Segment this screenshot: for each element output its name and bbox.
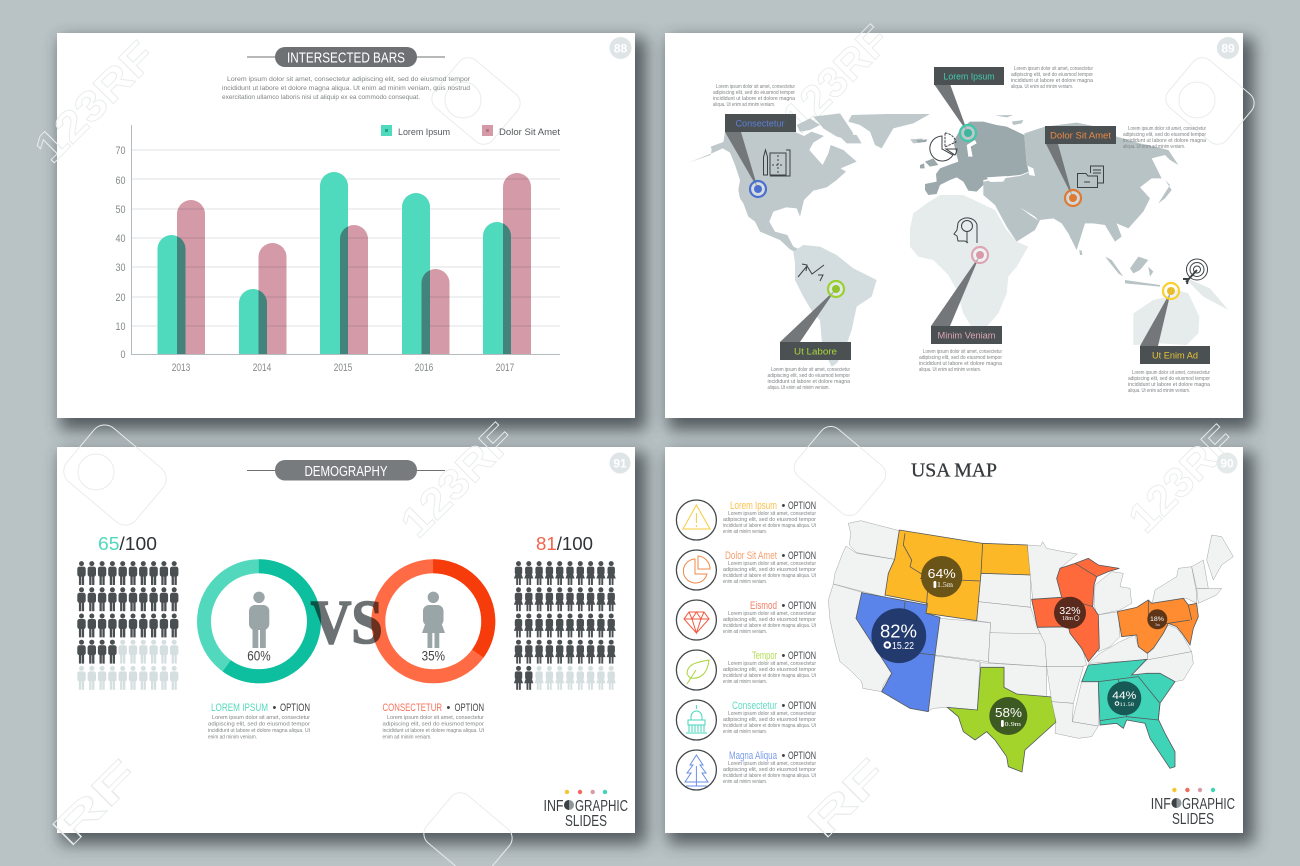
logo: infographic slides: INF xyxy=(1151,796,1171,813)
text block: ut enim ad xyxy=(1128,370,1210,394)
legend item: tempor: incididunt ut labore et dolore magna aliqua. Ut xyxy=(723,673,816,679)
text block: consectetur: incididunt ut labore et dolore magna xyxy=(713,96,795,102)
watermark: 123RF stamp: 123RF xyxy=(391,414,523,546)
data bubble: 58% xyxy=(989,697,1027,735)
legend xyxy=(381,125,560,138)
data bubble: 44%: 44% xyxy=(1112,690,1137,702)
heading: intersected bars xyxy=(247,47,445,67)
label: consectetur option: OPTION xyxy=(454,702,484,714)
data bubble: 44% xyxy=(1107,681,1141,715)
data bubble: 32%: 18m xyxy=(1062,616,1073,622)
legend item: lorem ipsum: Lorem ipsum dolor sit amet, consectetur xyxy=(728,511,816,517)
legend item: eiusmod: Eismod xyxy=(750,600,777,612)
legend item: lorem ipsum: adipiscing elit, sed do eiusmod tempor xyxy=(723,517,816,523)
region: midwest red xyxy=(1032,558,1119,662)
data bubble: 64%: 1.5m xyxy=(937,581,954,589)
icon: folder and documents xyxy=(1078,166,1104,188)
text block: ut labore: incididunt ut labore et dolore magna xyxy=(768,379,850,385)
legend item: dolor sit amet: • xyxy=(782,550,786,562)
text block: dolor sit amet: Lorem ipsum dolor sit amet, consectetur xyxy=(1128,126,1206,132)
arctic russia xyxy=(995,115,1023,125)
legend item: lorem ipsum: incididunt ut labore et dolore magna aliqua. Ut xyxy=(723,523,816,529)
text block: lorem ipsum: incididunt ut labore et dolore magna xyxy=(1011,78,1093,84)
logo: infographic slides xyxy=(1151,788,1235,828)
legend item: consectetur: adipiscing elit, sed do eiusmod tempor xyxy=(723,717,816,723)
label: consectetur option: CONSECTETUR xyxy=(382,702,442,714)
donut chart: teal 60% xyxy=(204,566,314,676)
text block: minim veniam: adipiscing elit, sed do eiusmod tempor xyxy=(919,355,1002,361)
text block: ut labore: Lorem ipsum dolor sit amet, consectetur xyxy=(771,367,850,373)
region: mountain north yellow xyxy=(885,530,1032,621)
label: lorem ipsum option: LOREM IPSUM xyxy=(211,702,268,714)
intro text block: exercitation ullamco laboris nisi ut aliquip ex ea commodo consequat. xyxy=(222,94,420,101)
legend item: eiusmod: Lorem ipsum dolor sit amet, consectetur xyxy=(728,611,816,617)
intro text block xyxy=(222,76,471,101)
inland seas xyxy=(967,140,1038,221)
text block: consectetur: adipiscing elit, sed do eiusmod tempor xyxy=(713,90,795,96)
legend list xyxy=(676,500,816,790)
panel: world map xyxy=(665,16,1259,418)
text block: lorem ipsum: adipiscing elit, sed do eiusmod tempor xyxy=(1011,72,1093,78)
y axis labels: 50 xyxy=(116,204,126,216)
text block: consectetur: aliqua. Ut enim ad minim veniam. xyxy=(713,102,775,108)
y axis labels xyxy=(116,145,126,361)
legend item: tempor: adipiscing elit, sed do eiusmod tempor xyxy=(723,667,816,673)
plain states west xyxy=(828,521,1047,712)
legend item: eiusmod: • xyxy=(782,600,786,612)
data bubble: 58%: 0.9m xyxy=(1004,721,1021,728)
data bubble: 18%: 3m xyxy=(1155,622,1161,627)
callout: ut enim ad xyxy=(1140,283,1210,364)
data bubble: 18%: 18% xyxy=(1150,616,1164,623)
y axis labels: 20 xyxy=(116,292,126,304)
x axis labels xyxy=(172,362,514,374)
callout: lorem ipsum: Lorem Ipsum xyxy=(944,72,995,82)
legend item: consectetur: OPTION xyxy=(788,700,816,712)
y axis labels: 10 xyxy=(116,321,126,333)
legend item: tempor: Tempor xyxy=(752,650,777,662)
bar chart xyxy=(116,125,560,374)
icon: head with keyhole xyxy=(954,218,977,243)
teal bars xyxy=(158,172,511,354)
page number badge xyxy=(1216,452,1238,474)
africa xyxy=(910,195,1028,330)
text block: ut labore: aliqua. Ut enim ad minim veniam. xyxy=(768,385,830,391)
legend item: tempor: enim ad minim veniam. xyxy=(723,679,767,685)
text block: dolor sit amet: adipiscing elit, sed do eiusmod tempor xyxy=(1123,132,1206,138)
icon: blueprint and pencil xyxy=(764,150,790,176)
legend item: dolor sit amet: Lorem ipsum dolor sit amet, consectetur xyxy=(728,561,816,567)
text block: dolor sit amet xyxy=(1123,126,1206,150)
page number badge xyxy=(1217,37,1239,59)
legend item: eiusmod: OPTION xyxy=(788,600,816,612)
europe asia africa australia xyxy=(910,115,1228,345)
x axis labels: 2014 xyxy=(253,362,271,374)
text block: left option: Lorem ipsum dolor sit amet, consectetur xyxy=(212,715,310,721)
text block: right option: Lorem ipsum dolor sit amet, consectetur xyxy=(387,715,484,721)
icon: pie chart xyxy=(930,133,957,161)
data bubble: 82% xyxy=(871,608,926,663)
icon: female figure xyxy=(422,592,445,648)
heading: intersected bars: INTERSECTED BARS xyxy=(287,50,405,66)
watermark: 123RF stamp xyxy=(25,32,525,171)
callout: dolor sit amet xyxy=(1045,126,1116,206)
icon: target xyxy=(1183,259,1208,284)
legend item: lorem ipsum: • xyxy=(782,500,786,512)
text block: right option: incididunt ut labore et dolore magna aliqua. Ut xyxy=(382,728,485,734)
panel: intersected bars xyxy=(25,32,635,418)
logo: infographic slides: SLIDES xyxy=(565,813,607,830)
logo: infographic slides xyxy=(544,790,628,830)
text block: dolor sit amet: incididunt ut labore et dolore magna xyxy=(1123,138,1206,144)
legend: Dolor Sit Amet xyxy=(499,127,560,138)
new guinea xyxy=(1183,277,1228,310)
icon: growth arrows xyxy=(798,264,824,281)
text block: ut enim ad: aliqua. Ut enim ad minim veniam. xyxy=(1128,388,1190,394)
southeast asia islands xyxy=(1105,257,1160,287)
watermark: 123RF stamp: 123RF xyxy=(25,32,164,171)
pictogram: right people grid xyxy=(514,561,616,690)
legend item: lorem ipsum xyxy=(676,500,816,540)
pink bars xyxy=(177,173,531,354)
text block: ut labore xyxy=(768,367,850,391)
legend item: dolor sit amet xyxy=(676,550,816,590)
usa map: western states xyxy=(828,521,1056,772)
logo: infographic slides: GRAPHIC xyxy=(1182,796,1235,813)
callout: ut labore xyxy=(780,281,851,360)
legend item: tempor: • xyxy=(782,650,786,662)
legend item: dolor sit amet: incididunt ut labore et dolore magna aliqua. Ut xyxy=(723,573,816,579)
south america xyxy=(793,245,877,367)
page number badge: 90 xyxy=(1220,456,1234,470)
text block: ut labore: adipiscing elit, sed do eiusmod tempor xyxy=(768,373,850,379)
pictogram: left people grid xyxy=(77,561,178,690)
legend item: consectetur: enim ad minim veniam. xyxy=(723,729,767,735)
y axis labels: 40 xyxy=(116,233,126,245)
callout: minim veniam: Minim Veniam xyxy=(938,330,996,342)
text block: left option xyxy=(208,715,311,740)
legend item: lorem ipsum: enim ad minim veniam. xyxy=(723,529,767,535)
legend item: tempor xyxy=(676,650,816,690)
text block: lorem ipsum: aliqua. Ut enim ad minim veniam. xyxy=(1011,84,1073,90)
legend item: tempor: Lorem ipsum dolor sit amet, consectetur xyxy=(728,661,816,667)
callout: minim veniam xyxy=(931,247,1002,344)
page number badge: 91 xyxy=(613,456,627,470)
legend item: magna aliqua: OPTION xyxy=(788,750,816,762)
legend item: magna aliqua: • xyxy=(782,750,786,762)
legend item: tempor: OPTION xyxy=(788,650,816,662)
stat: 65/100: 65/100 xyxy=(98,533,157,554)
legend item: magna aliqua: Lorem ipsum dolor sit amet, consectetur xyxy=(728,761,816,767)
text block: minim veniam: Lorem ipsum dolor sit amet, consectetur xyxy=(923,349,1002,355)
watermark: 123RF stamp: 123RF xyxy=(773,16,898,141)
x axis labels: 2016 xyxy=(415,362,433,374)
legend item: eiusmod xyxy=(676,600,816,640)
legend item: magna aliqua: incididunt ut labore et dolore magna aliqua. Ut xyxy=(723,773,816,779)
heading: usa map: USA MAP xyxy=(911,460,997,482)
data bubble: 58%: 58% xyxy=(995,706,1022,720)
data bubble: 44%: 11.58 xyxy=(1120,702,1134,708)
donut chart: red 35% xyxy=(378,566,488,676)
watermark: 123RF stamp xyxy=(43,414,523,866)
page number badge: 88 xyxy=(614,42,627,56)
region: northeast orange xyxy=(1117,598,1198,653)
data bubble: 18% xyxy=(1147,609,1167,629)
watermark: 123RF stamp: 123RF xyxy=(1119,416,1244,541)
europe xyxy=(916,122,1033,195)
page number badge: 89 xyxy=(1221,42,1235,56)
watermark: 123RF stamp: RF xyxy=(798,749,895,846)
watermark: 123RF stamp xyxy=(789,416,1244,846)
legend item: dolor sit amet: OPTION xyxy=(788,550,816,562)
legend item: eiusmod: incididunt ut labore et dolore magna aliqua. Ut xyxy=(723,623,816,629)
page number badge xyxy=(610,452,630,474)
text block: minim veniam: incididunt ut labore et dolore magna xyxy=(919,361,1002,367)
versus mark: VS xyxy=(311,589,383,657)
text block: lorem ipsum xyxy=(1011,66,1093,90)
stat: 81/100: 81/100 xyxy=(536,533,593,554)
legend item: consectetur: • xyxy=(782,700,786,712)
panel: usa map xyxy=(665,416,1244,846)
americas and greenland xyxy=(688,113,930,367)
legend item: consectetur: Consectetur xyxy=(732,700,777,712)
legend item: dolor sit amet: enim ad minim veniam. xyxy=(723,579,767,585)
text block: ut enim ad: adipiscing elit, sed do eiusmod tempor xyxy=(1128,376,1210,382)
australia xyxy=(1133,290,1199,345)
legend item: consectetur xyxy=(676,700,816,740)
callout: dolor sit amet: Dolor Sit Amet xyxy=(1050,130,1111,142)
legend item: lorem ipsum: Lorem Ipsum xyxy=(730,500,777,512)
legend item: eiusmod: adipiscing elit, sed do eiusmod tempor xyxy=(723,617,816,623)
legend item: magna aliqua: Magna Aliqua xyxy=(729,750,778,762)
text block: consectetur: Lorem ipsum dolor sit amet, consectetur xyxy=(716,84,795,90)
label: consectetur option: • xyxy=(446,702,450,714)
arctic islands and greenland xyxy=(797,113,930,148)
heading: demography: DEMOGRAPHY xyxy=(304,463,388,480)
legend item: lorem ipsum: OPTION xyxy=(788,500,816,512)
donut value: 60%: 60% xyxy=(247,648,271,664)
legend item: dolor sit amet: adipiscing elit, sed do eiusmod tempor xyxy=(723,567,816,573)
data bubble: 64%: 64% xyxy=(928,566,956,581)
y axis labels: 0 xyxy=(120,349,126,361)
label: lorem ipsum option: • xyxy=(272,702,276,714)
text block: minim veniam: aliqua. Ut enim ad minim veniam. xyxy=(919,367,981,373)
text block: lorem ipsum: Lorem ipsum dolor sit amet, consectetur xyxy=(1014,66,1093,72)
callout: ut enim ad: Ut Enim Ad xyxy=(1152,350,1198,362)
watermark: 123RF stamp xyxy=(773,16,1259,149)
text block: dolor sit amet: aliqua. Ut enim ad minim veniam. xyxy=(1123,144,1185,150)
plain states east xyxy=(1027,535,1233,738)
text block: ut enim ad: Lorem ipsum dolor sit amet, consectetur xyxy=(1132,370,1210,376)
asia xyxy=(983,123,1178,255)
region: southeast teal xyxy=(1082,659,1175,768)
intro text block: Lorem ipsum dolor sit amet, consectetur adipiscing elit, sed do eiusmod tempor xyxy=(227,76,471,83)
text block: right option: adipiscing elit, sed do eiusmod tempor xyxy=(382,722,484,728)
label: lorem ipsum option: OPTION xyxy=(280,702,310,714)
logo: infographic slides: SLIDES xyxy=(1172,811,1214,828)
heading: demography xyxy=(247,460,445,480)
data bubble: 82%: 82% xyxy=(880,621,917,641)
region: southwest blue xyxy=(856,593,940,712)
usa map: eastern states xyxy=(1027,535,1233,768)
x axis labels: 2017 xyxy=(496,362,514,374)
legend item: consectetur: incididunt ut labore et dolore magna aliqua. Ut xyxy=(723,723,816,729)
legend item: magna aliqua: adipiscing elit, sed do eiusmod tempor xyxy=(723,767,816,773)
x axis labels: 2013 xyxy=(172,362,190,374)
callout: consectetur xyxy=(725,114,796,197)
donut value: 35%: 35% xyxy=(422,648,445,664)
legend item: consectetur: Lorem ipsum dolor sit amet, consectetur xyxy=(728,711,816,717)
text block: right option: enim ad minim veniam. xyxy=(382,734,432,740)
legend item: magna aliqua: enim ad minim veniam. xyxy=(723,779,767,785)
legend item: eiusmod: enim ad minim veniam. xyxy=(723,629,767,635)
text block: minim veniam xyxy=(919,349,1002,373)
text block: left option: adipiscing elit, sed do eiusmod tempor xyxy=(208,722,310,728)
legend: Lorem Ipsum xyxy=(398,127,450,138)
legend item: dolor sit amet: Dolor Sit Amet xyxy=(725,550,777,562)
data bubble: 64% xyxy=(921,556,962,597)
region: texas green xyxy=(947,667,1056,772)
data bubble: 32% xyxy=(1054,597,1086,629)
y axis labels: 70 xyxy=(116,145,126,157)
y axis labels: 60 xyxy=(116,175,126,187)
y axis labels: 30 xyxy=(116,262,126,274)
logo: infographic slides: INF xyxy=(544,798,564,815)
text block: right option xyxy=(382,715,485,740)
callout: consectetur: Consectetur xyxy=(736,118,784,130)
north america xyxy=(688,132,857,254)
legend item: magna aliqua xyxy=(676,750,816,790)
callout: ut labore: Ut Labore xyxy=(794,346,837,358)
icon: male figure xyxy=(249,592,269,648)
panel: demography xyxy=(43,414,635,866)
logo: infographic slides: GRAPHIC xyxy=(575,798,628,815)
callout: lorem ipsum xyxy=(934,67,1004,141)
intro text block: incididunt ut labore et dolore magna aliqua. Ut enim ad minim veniam, quis nostrud xyxy=(222,85,470,92)
x axis labels: 2015 xyxy=(334,362,352,374)
watermark: 123RF stamp: RF xyxy=(43,750,147,854)
text block: ut enim ad: incididunt ut labore et dolore magna xyxy=(1128,382,1210,388)
page number badge xyxy=(610,37,632,59)
text block: left option: enim ad minim veniam. xyxy=(208,734,257,740)
text block: left option: incididunt ut labore et dolore magna aliqua. Ut xyxy=(208,728,311,734)
data bubble: 82%: 15.22 xyxy=(892,641,914,652)
data bubble: 32%: 32% xyxy=(1059,605,1081,617)
text block: consectetur xyxy=(713,84,795,108)
